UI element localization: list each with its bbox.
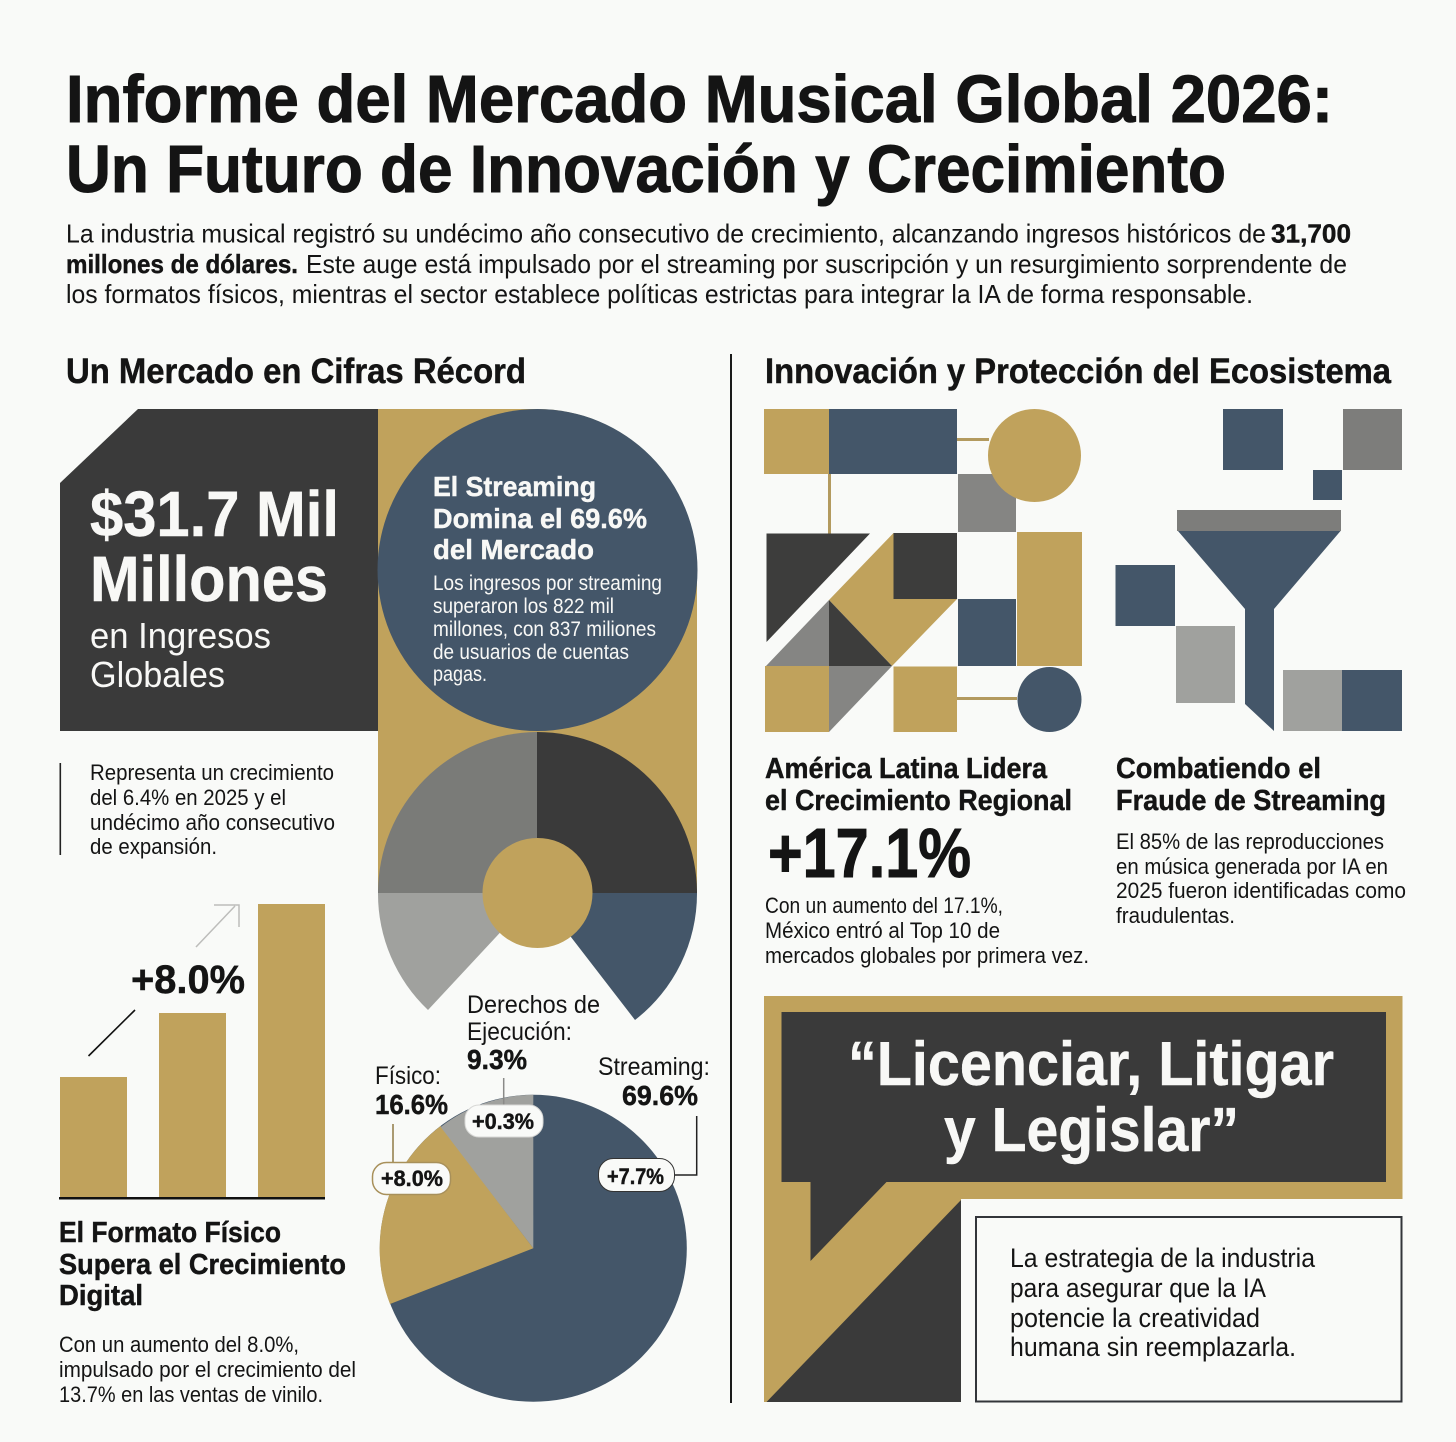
callout: AI strategy box: para asegurar que la IA <box>1010 1273 1266 1303</box>
callout: growth text: de expansión. <box>90 834 217 859</box>
panel: streaming circle: del Mercado <box>433 534 594 565</box>
callout: growth text: undécimo año consecutivo <box>90 810 335 835</box>
panel: total revenue: Millones <box>90 543 328 615</box>
label: performance rights: Derechos de <box>467 991 600 1019</box>
callout: AI strategy box: La estrategia de la industria <box>1010 1243 1316 1273</box>
callout: growth text <box>60 760 335 859</box>
text block: Latin America: América Latina Lidera <box>765 753 1048 785</box>
panel: streaming circle: superaron los 822 mil <box>433 595 614 618</box>
pie chart: revenue share <box>372 991 710 1402</box>
text block: streaming fraud: Combatiendo el <box>1116 753 1321 785</box>
heading: left section: Un Mercado en Cifras Récord <box>66 352 526 391</box>
label: physical: Físico: <box>375 1062 441 1090</box>
panel: quote speech bubble: y Legislar” <box>944 1096 1239 1165</box>
text block: Latin America: México entró al Top 10 de <box>765 918 1000 943</box>
panel: streaming circle <box>378 409 698 731</box>
text block: Latin America <box>765 753 1089 968</box>
callout: AI strategy box: potencie la creatividad <box>1010 1303 1260 1333</box>
panel: total revenue <box>60 409 378 731</box>
label: streaming: 69.6% <box>622 1080 698 1111</box>
title: Un Futuro de Innovación y Crecimiento <box>66 132 1226 207</box>
pill: +0.3%: +0.3% <box>472 1109 534 1134</box>
text block: physical format: impulsado por el crecimiento del <box>59 1357 356 1382</box>
title: Informe del Mercado Musical Global 2026: <box>66 62 1333 137</box>
callout: growth text: del 6.4% en 2025 y el <box>90 785 286 810</box>
intro text: Este auge está impulsado por el streaming por suscripción y un resurgimiento sorprendente de <box>306 249 1347 279</box>
callout: AI strategy box <box>976 1217 1402 1402</box>
bar chart: physical format growth <box>59 904 325 1200</box>
text block: physical format <box>59 1217 356 1407</box>
text block: physical format: Supera el Crecimiento <box>59 1249 346 1281</box>
label: physical: 16.6% <box>375 1089 448 1120</box>
pill: +7.7% <box>598 1158 674 1192</box>
label: performance rights: 9.3% <box>467 1044 527 1075</box>
pill: +8.0% <box>372 1162 450 1194</box>
pill: +8.0%: +8.0% <box>381 1166 443 1191</box>
intro text: 31,700 <box>1271 218 1351 248</box>
text block: streaming fraud: fraudulentas. <box>1116 903 1235 928</box>
panel: total revenue: Globales <box>90 654 225 695</box>
label: performance rights: Ejecución: <box>467 1018 572 1046</box>
callout: growth text: Representa un crecimiento <box>90 760 334 785</box>
callout: AI strategy box: humana sin reemplazarla. <box>1010 1332 1296 1362</box>
intro text: millones de dólares. <box>66 249 298 279</box>
intro text: La industria musical registró su undécimo año consecutivo de crecimiento, alcanzando ingresos históricos de <box>66 218 1266 248</box>
text block: physical format: El Formato Físico <box>59 1217 281 1249</box>
label: streaming <box>598 1053 710 1111</box>
panel: streaming circle: Los ingresos por streaming <box>433 572 662 595</box>
title <box>66 62 1333 207</box>
label: streaming: Streaming: <box>598 1053 710 1081</box>
label: performance rights <box>467 991 600 1075</box>
text block: Latin America: mercados globales por primera vez. <box>765 943 1089 968</box>
text block: streaming fraud <box>1116 753 1406 928</box>
text block: physical format: Con un aumento del 8.0%, <box>59 1332 299 1357</box>
text block: streaming fraud: 2025 fueron identificadas como <box>1116 878 1406 903</box>
text block: Latin America: el Crecimiento Regional <box>765 785 1072 817</box>
panel: gold backing shape <box>378 409 697 893</box>
panel: total revenue: en Ingresos <box>90 615 271 656</box>
text block: streaming fraud: en música generada por IA en <box>1116 854 1388 879</box>
bar chart: physical format growth: +8.0% <box>131 958 245 1002</box>
text block: Latin America: Con un aumento del 17.1%, <box>765 893 1003 918</box>
panel: streaming circle: pagas. <box>433 663 487 686</box>
pill: +0.3% <box>465 1105 543 1137</box>
panel: total revenue: $31.7 Mil <box>90 478 339 550</box>
geometric donut graphic <box>378 732 697 1020</box>
text block: streaming fraud: El 85% de las reproducciones <box>1116 829 1384 854</box>
text block: physical format: 13.7% en las ventas de vinilo. <box>59 1382 323 1407</box>
panel: streaming circle: Domina el 69.6% <box>433 503 647 534</box>
text block: physical format: Digital <box>59 1280 143 1312</box>
text block: Latin America: +17.1% <box>768 814 971 892</box>
heading: right section: Innovación y Protección del Ecosistema <box>765 352 1391 391</box>
panel: quote speech bubble <box>764 996 1402 1402</box>
intro text <box>66 218 1351 309</box>
column divider <box>730 354 732 1403</box>
panel: streaming circle: millones, con 837 miliones <box>433 618 656 641</box>
icon: geometric mosaic for Latin America <box>764 409 1082 732</box>
panel: streaming circle: de usuarios de cuentas <box>433 641 629 664</box>
label: physical <box>375 1062 448 1120</box>
panel: quote speech bubble: “Licenciar, Litigar <box>848 1030 1334 1099</box>
panel: streaming circle: El Streaming <box>433 471 596 502</box>
intro text: los formatos físicos, mientras el sector establece políticas estrictas para integrar la IA de forma responsable. <box>66 279 1253 309</box>
pill: +7.7%: +7.7% <box>607 1164 664 1189</box>
icon: fraud filter funnel <box>1116 409 1402 731</box>
text block: streaming fraud: Fraude de Streaming <box>1116 785 1386 817</box>
